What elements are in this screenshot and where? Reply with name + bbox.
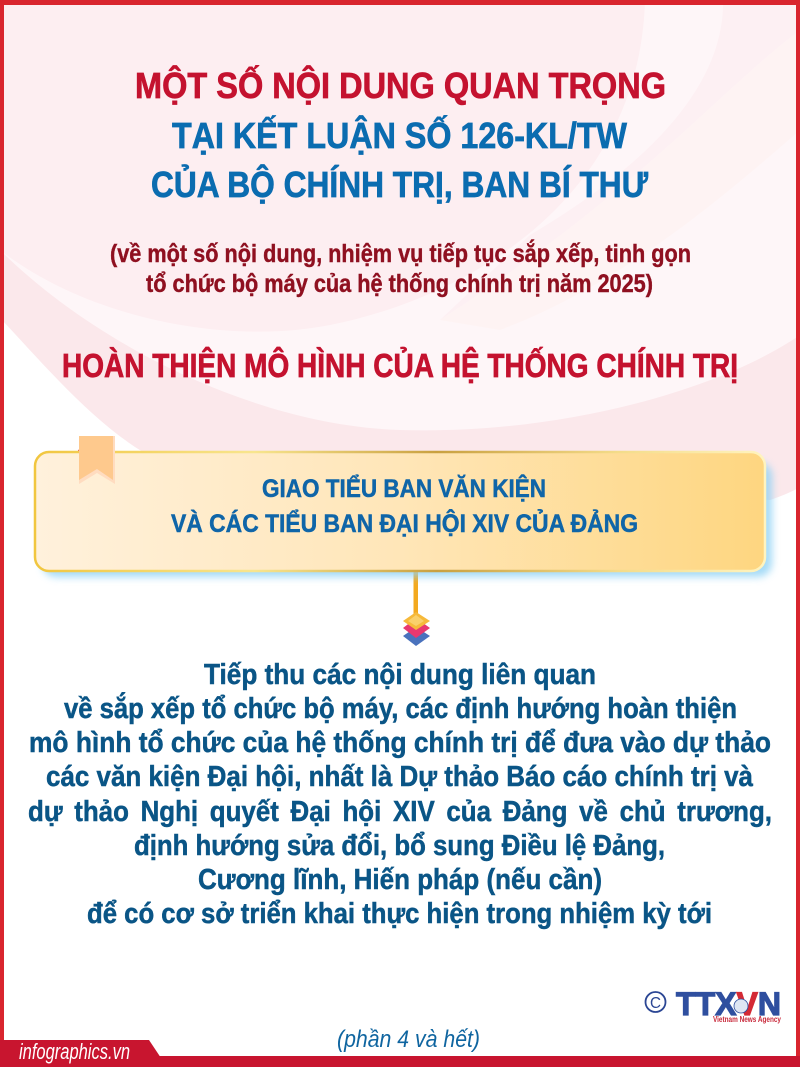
subtitle: (về một số nội dung, nhiệm vụ tiếp tục sắp xếp, tinh gọn [110,238,691,268]
title: line 1: MỘT SỐ NỘI DUNG QUAN TRỌNG [135,64,666,106]
title: line 2: TẠI KẾT LUẬN SỐ 126-KL/TW [172,114,627,156]
box text [171,473,638,538]
icon: copyright mark: C [650,995,661,1012]
body text: để có cơ sở triển khai thực hiện trong nhiệm kỳ tới [87,898,712,930]
subtitle [110,238,691,298]
panel: highlighted box [35,436,772,577]
subtitle: tổ chức bộ máy của hệ thống chính trị năm 2025) [146,270,653,298]
footer site name: infographics.vn [19,1039,130,1064]
body text: Cương lĩnh, Hiến pháp (nếu cần) [198,864,602,896]
icon: bookmark ribbon [78,436,115,484]
box text: VÀ CÁC TIỂU BAN ĐẠI HỘI XIV CỦA ĐẢNG [171,508,638,538]
body text: định hướng sửa đổi, bổ sung Điều lệ Đảng, [134,830,665,862]
icon: globe [734,999,748,1013]
title: line 3: CỦA BỘ CHÍNH TRỊ, BAN BÍ THƯ [151,163,648,205]
connector line [414,570,418,614]
logo tagline: Vietnam News Agency [713,1015,781,1024]
logo: TTXVN [646,986,781,1024]
box text: GIAO TIỂU BAN VĂN KIỆN [262,473,546,503]
icon: stacked diamonds [403,612,430,646]
body text [28,659,772,930]
logo wordmark: TTXVN [676,986,781,1022]
part note: (phần 4 và hết) [337,1026,480,1053]
body text: Tiếp thu các nội dung liên quan [204,659,596,691]
footer bar [0,1039,800,1067]
